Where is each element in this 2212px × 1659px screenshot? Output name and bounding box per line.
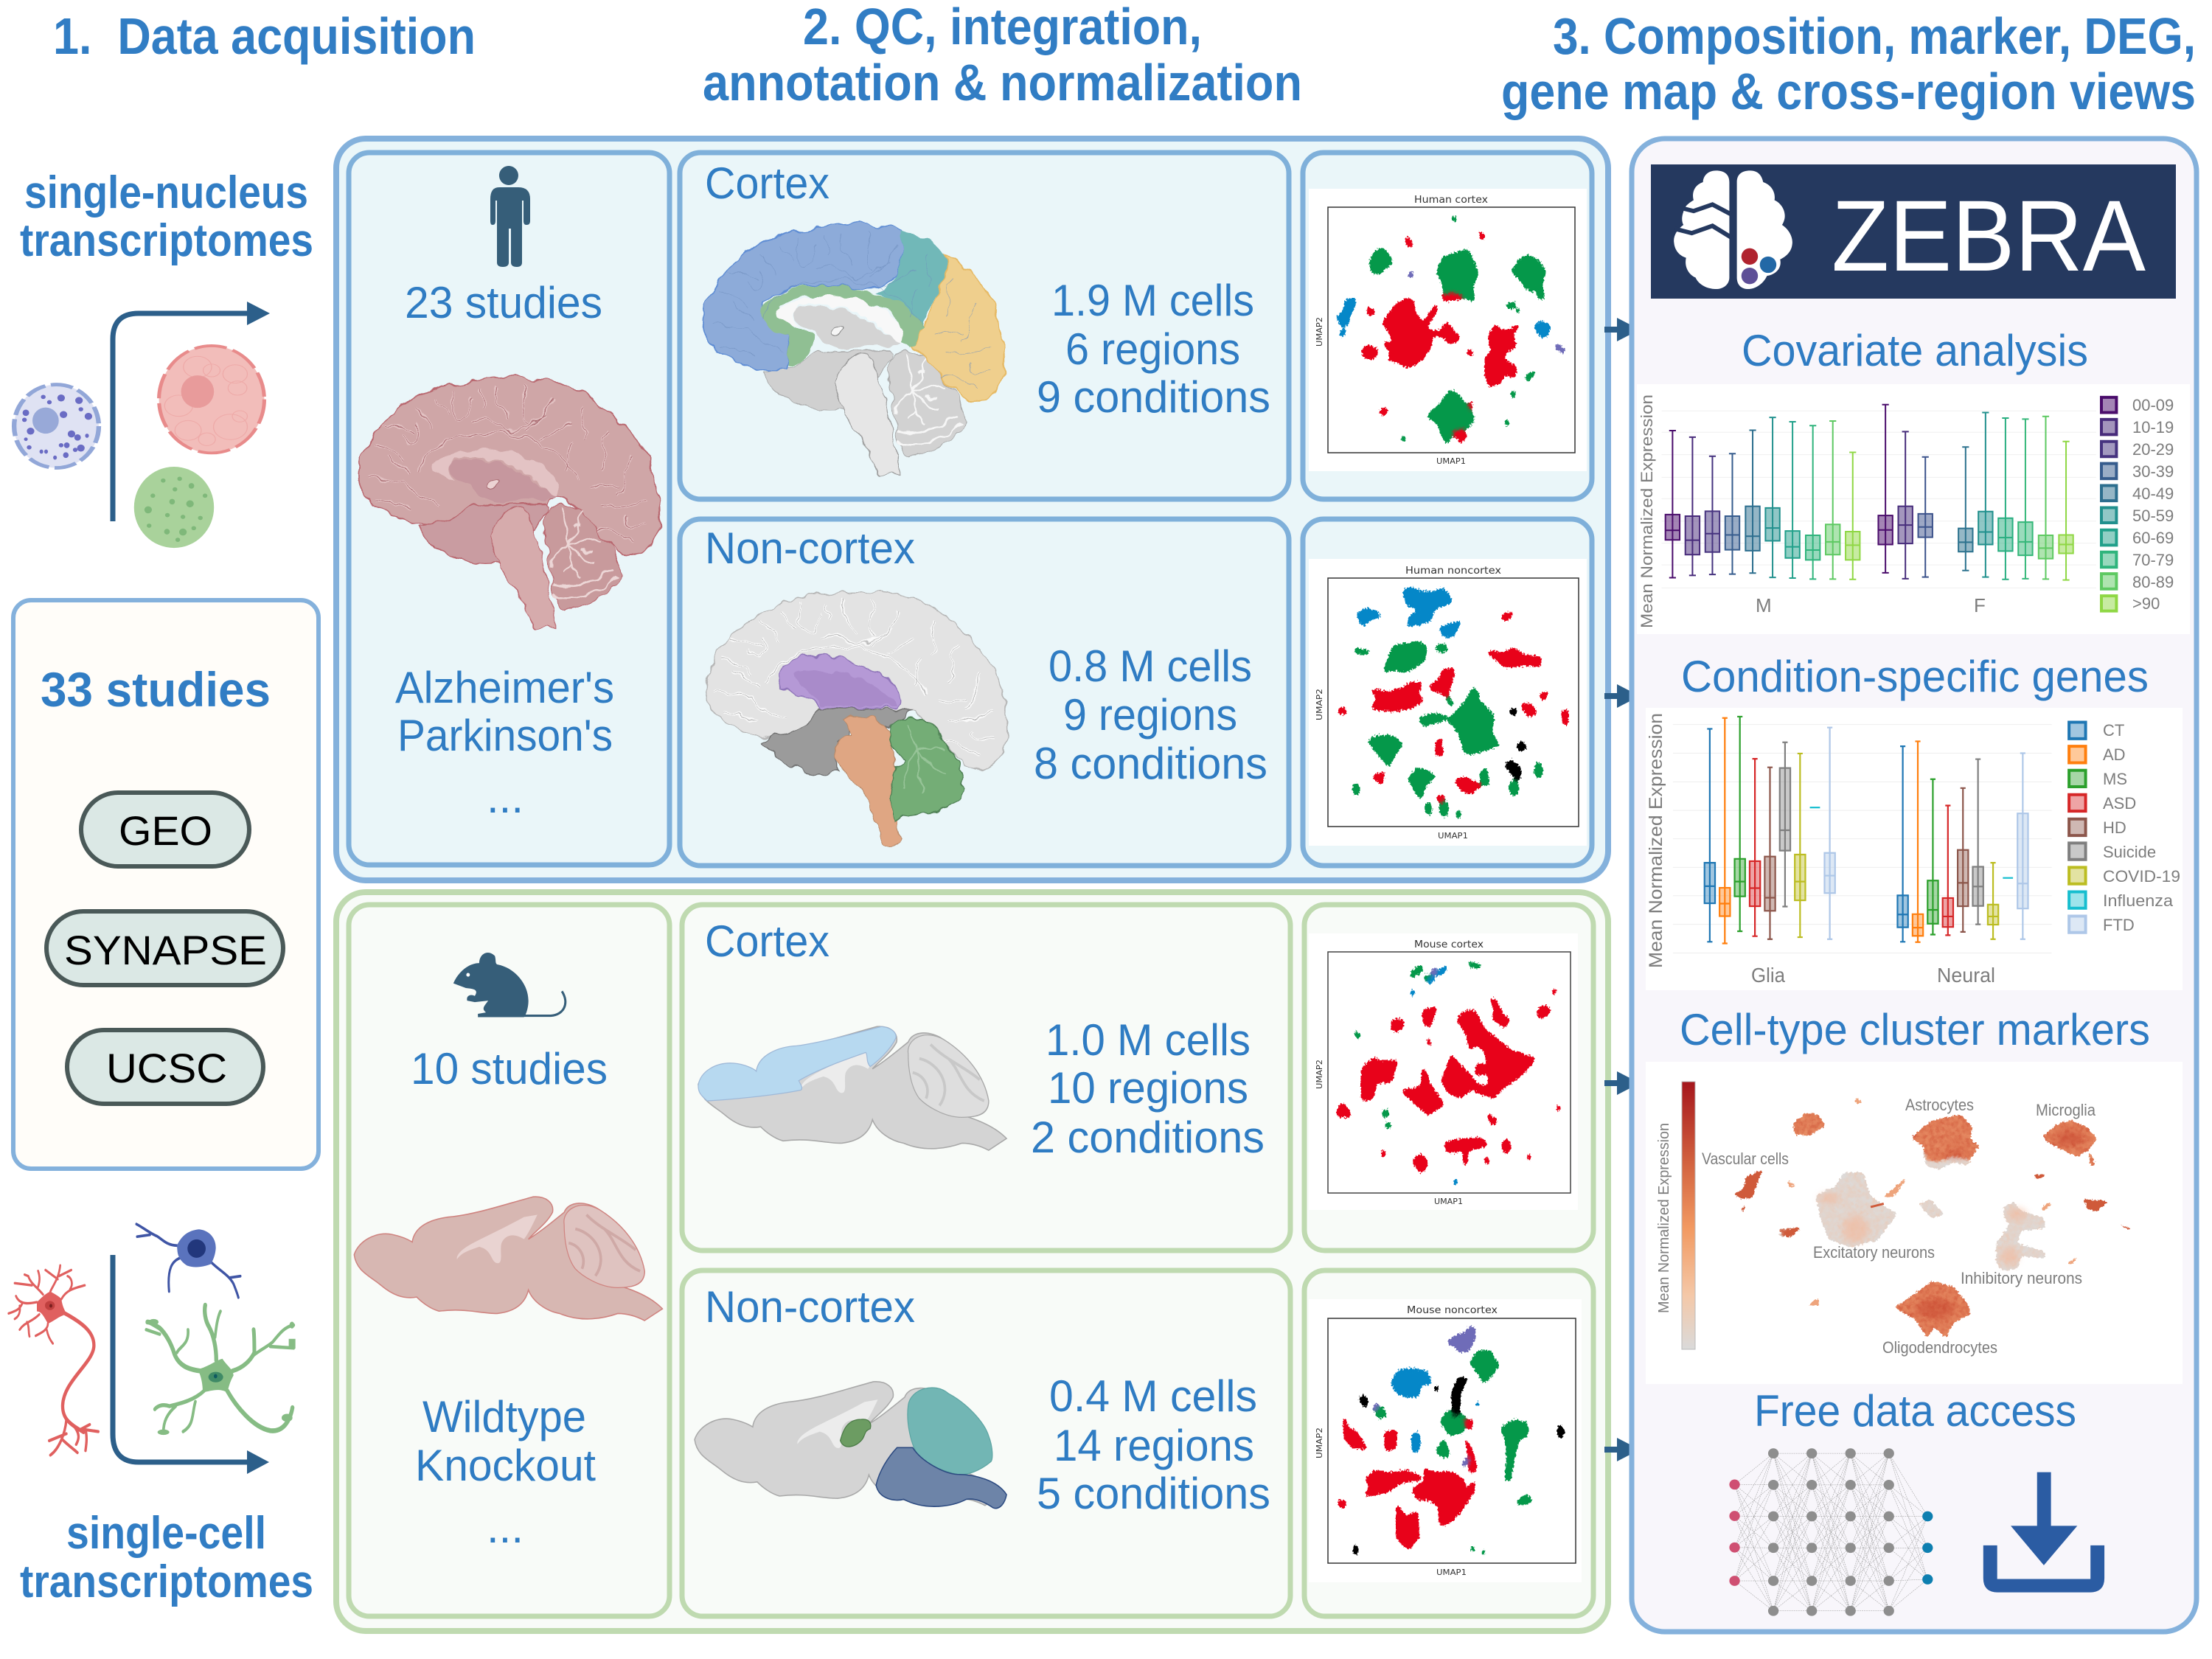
pill: SYNAPSE: SYNAPSE [64,927,267,973]
chart: covariate box plot: 10-19 [2132,418,2174,437]
chart: condition box plot: Glia [1751,964,1785,987]
text: human cortex stats [1037,276,1270,422]
text: mouse models [415,1392,596,1552]
chart: mouse cortex scatter [1338,963,1560,1183]
text: mouse cortex stats [1031,1015,1265,1162]
panel: UMAP mouse non-cortex [1304,1270,1593,1616]
chart: marker expression UMAP: Mean Normalized Expression [1656,1123,1672,1313]
heading: 2. QC, integration, annotation & normalization [703,0,1302,111]
icon: neural network [1729,1448,1933,1616]
icon: pink human brain [359,378,661,628]
chart: covariate box plot: 80-89 [2132,573,2174,591]
text: mouse non-cortex stats [1037,1371,1270,1518]
panel: UMAP human cortex: UMAP1 [1436,456,1466,466]
chart: covariate box plot: M [1756,594,1772,616]
chart: covariate box plot: 70-79 [2132,551,2174,569]
panel: human overview [349,153,669,865]
chart: marker expression UMAP: Microglia [2036,1101,2096,1119]
panel: UMAP mouse cortex: UMAP2 [1315,1060,1324,1089]
pill: GEO [81,793,249,866]
heading: 3. Composition, marker, DEG, gene map & cross-region views [1501,7,2196,120]
heading: Non-cortex: Non-cortex [705,1282,915,1332]
icon: cortex regions brain [703,223,1006,475]
icon: red nucleus [159,346,264,453]
panel: mouse overview [349,905,669,1616]
panel: UMAP human cortex: UMAP2 [1315,317,1324,347]
chart: condition box plot: Suicide [2103,843,2156,861]
chart: human cortex scatter [1338,217,1565,442]
heading: Non-cortex: Non-cortex [705,524,915,573]
label: single-cell transcriptomes [20,1508,313,1607]
chart: condition box plot [1646,708,2183,990]
icon: mouse [453,953,566,1018]
panel: UMAP human non-cortex: UMAP1 [1438,831,1468,841]
text: human non-cortex stats [1034,641,1267,788]
chart: marker expression UMAP: Excitatory neurons [1813,1243,1935,1262]
icon: nuclei cells [14,346,264,548]
text: mouse non-cortex stats: 5 conditions [1037,1469,1270,1518]
text: human cortex stats: 1.9 M cells [1051,276,1254,325]
text: mouse non-cortex stats: 0.4 M cells [1049,1371,1257,1421]
text: human non-cortex stats: 8 conditions [1034,739,1267,788]
pill: SYNAPSE [46,911,283,985]
icon: blue nucleus [14,385,99,467]
chart: condition box plot: Influenza [2103,891,2174,910]
chart: covariate box plot: Mean Normalized Expression [1638,394,1656,628]
chart: marker expression UMAP: Inhibitory neurons [1961,1269,2082,1287]
chart: marker expression UMAP: Astrocytes [1905,1096,1974,1114]
panel: UMAP mouse non-cortex: UMAP2 [1315,1427,1324,1458]
heading: Cell-type cluster markers: Cell-type cluster markers [1680,1005,2150,1054]
chart: covariate box plot: F [1974,594,1986,616]
arrow: single-nucleus [113,302,270,521]
icon: green nucleus [134,467,214,548]
icon: red neuron [9,1265,98,1455]
text: 33 studies: 33 studies [41,662,271,717]
panel: UMAP mouse cortex: Mouse cortex [1414,939,1484,950]
panel: UMAP human cortex [1303,153,1592,499]
panel: human [336,139,1608,880]
text: 10 studies: 10 studies [411,1044,608,1093]
chart: covariate box plot: 50-59 [2132,507,2174,525]
chart: covariate box plot: 40-49 [2132,484,2174,503]
icon: green astrocyte [146,1305,296,1435]
heading: 2. QC, integration, annotation & normalization: annotation & normalization [703,54,1302,111]
panel: human non-cortex [680,519,1289,866]
icon: brain logo [1674,170,1792,289]
chart: covariate box plot: 60-69 [2132,529,2174,547]
chart: mouse non-cortex scatter [1338,1329,1563,1554]
panel: UMAP mouse cortex: UMAP1 [1434,1197,1463,1206]
text: mouse models: ... [487,1503,524,1552]
panel: UMAP human cortex: Human cortex [1414,195,1488,206]
label: single-cell transcriptomes: single-cell [66,1508,266,1559]
text: mouse models: Knockout [415,1441,596,1490]
chart: marker expression UMAP: Oligodendrocytes [1882,1338,1997,1357]
panel: UMAP mouse non-cortex: Mouse noncortex [1407,1305,1498,1316]
arrow: single-cell [113,1255,269,1474]
icon: non-cortex regions brain [706,591,1009,845]
label: single-cell transcriptomes: transcriptomes [20,1557,313,1607]
arrow: mouse cortex to results [1604,1071,1640,1095]
text: human cortex stats: 6 regions [1065,324,1240,374]
panel: results [1632,139,2197,1632]
pill: GEO: GEO [119,807,212,854]
chart: human non-cortex scatter [1339,589,1568,817]
text: conditions: Parkinson's [397,711,613,760]
panel: UMAP mouse non-cortex: UMAP1 [1436,1568,1467,1577]
text: human non-cortex stats: 9 regions [1063,690,1237,740]
chart: condition box plot: ASD [2103,794,2136,813]
panel: mouse cortex [682,905,1290,1251]
colorbar [1682,1082,1695,1349]
chart: covariate box plot: >90 [2132,594,2160,613]
chart: covariate box plot [1637,384,2190,634]
panel: UMAP human non-cortex [1303,519,1592,866]
icon: pink mouse brain [354,1197,662,1321]
chart: covariate box plot: 20-29 [2132,440,2174,459]
panel: mouse [336,892,1608,1631]
text: conditions: ... [487,773,524,822]
chart: covariate box plot: 30-39 [2132,462,2174,481]
label: single-nucleus transcriptomes: transcriptomes [20,215,313,266]
label: single-nucleus transcriptomes [20,167,313,266]
text: human cortex stats: 9 conditions [1037,372,1270,422]
text: ZEBRA: ZEBRA [1832,180,2146,293]
text: conditions [395,663,614,822]
chart: marker expression UMAP [1646,1062,2183,1384]
chart: condition box plot: CT [2103,721,2124,740]
chart: condition box plot: HD [2103,818,2126,837]
icon: blue neuron [136,1224,240,1298]
text: mouse cortex stats: 2 conditions [1031,1113,1265,1162]
heading: Cortex: Cortex [705,917,830,966]
text: 23 studies: 23 studies [405,278,602,327]
chart: condition box plot: Neural [1937,964,1995,987]
chart: marker expression UMAP: Vascular cells [1702,1150,1789,1168]
pill: UCSC: UCSC [106,1045,227,1091]
text: mouse non-cortex stats: 14 regions [1054,1421,1254,1470]
heading: Cortex: Cortex [705,159,830,208]
text: conditions: Alzheimer's [395,663,614,712]
icon: download [1983,1472,2104,1593]
text: mouse cortex stats: 10 regions [1048,1063,1248,1113]
pill: UCSC [67,1030,263,1104]
heading: Free data access: Free data access [1754,1386,2076,1436]
text: human non-cortex stats: 0.8 M cells [1048,641,1252,691]
panel: UMAP human non-cortex: Human noncortex [1405,566,1501,577]
chart: condition box plot: MS [2103,770,2127,788]
chart: condition box plot: COVID-19 [2103,867,2180,886]
icon: single cells (neurons) [9,1224,296,1455]
heading: Covariate analysis: Covariate analysis [1742,326,2088,375]
banner: ZEBRA logo [1651,164,2176,299]
icon: mouse cortex brain [698,1026,1006,1150]
heading: Condition-specific genes: Condition-specific genes [1681,652,2149,701]
arrow: human cortex to results [1604,318,1640,341]
label: single-nucleus transcriptomes: single-nucleus [24,167,308,218]
heading: 1. Data acquisition: 1. Data acquisition [53,7,476,65]
panel: UMAP mouse cortex [1304,905,1593,1251]
chart: condition box plot: Mean Normalized Expression [1646,713,1666,968]
chart: condition box plot: AD [2103,745,2126,764]
panel: human cortex [680,153,1289,499]
chart: condition box plot: FTD [2103,916,2135,934]
chart: covariate box plot: 00-09 [2132,396,2174,414]
text: mouse models: Wildtype [422,1392,586,1441]
panel: 33 studies [13,600,319,1169]
arrow: mouse non-cortex to results [1604,1438,1640,1461]
arrow: human non-cortex to results [1604,684,1640,708]
panel: mouse non-cortex [682,1270,1290,1616]
panel: UMAP human non-cortex: UMAP2 [1315,689,1324,720]
icon: mouse non-cortex brain [695,1382,1006,1509]
icon: human figure [490,166,530,267]
text: mouse cortex stats: 1.0 M cells [1046,1015,1251,1065]
